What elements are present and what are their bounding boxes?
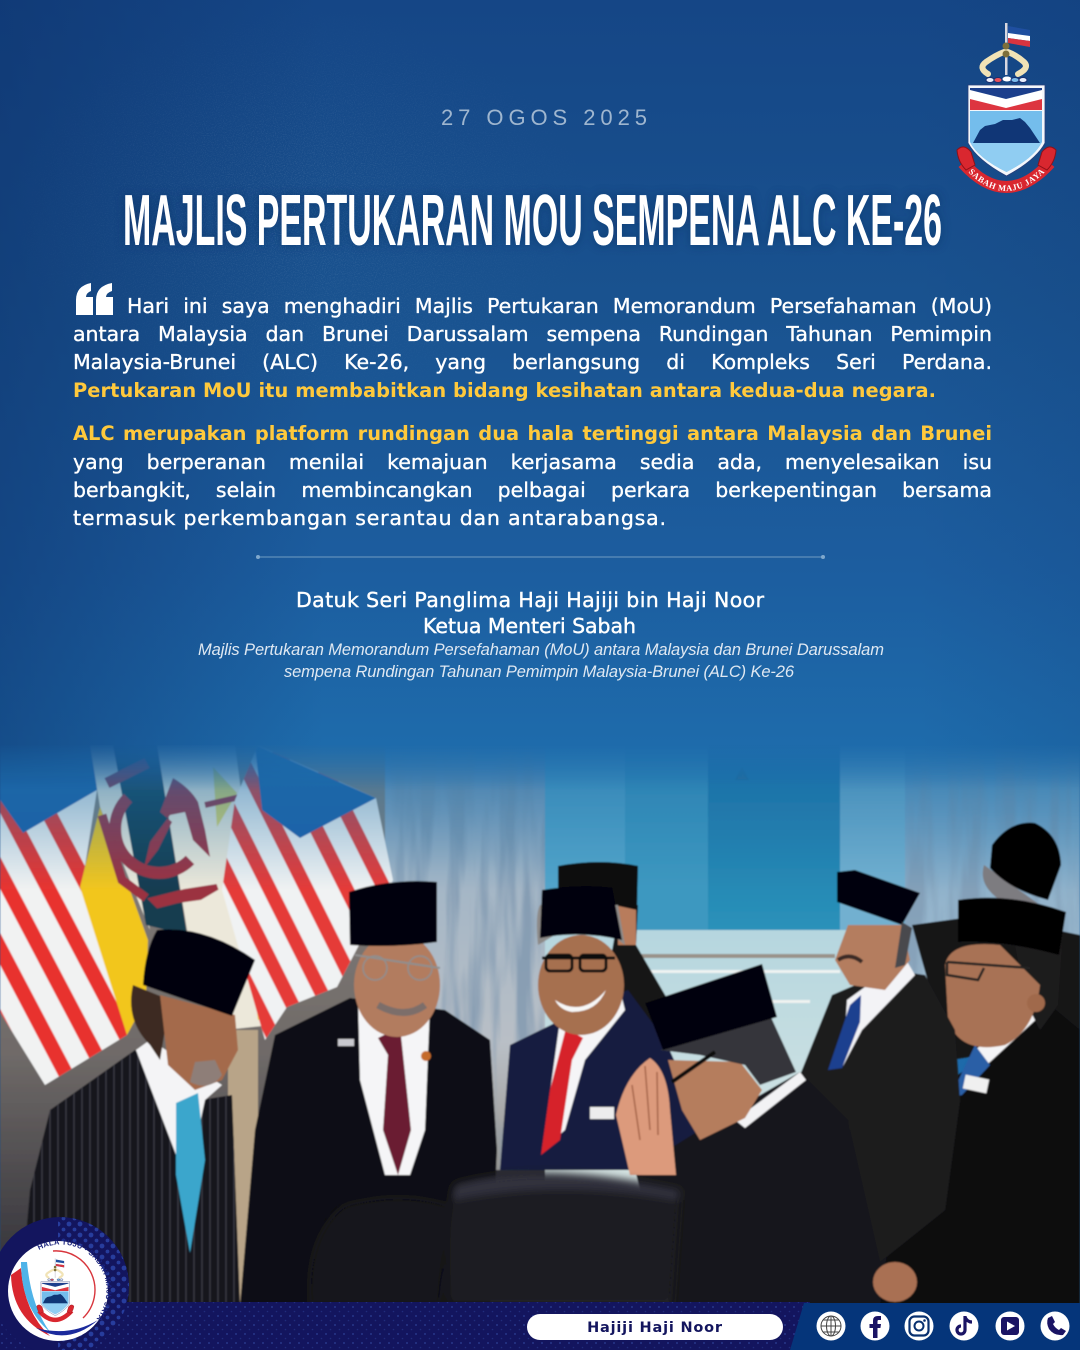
closing lines of both paragraphs: Pertukaran MoU itu membabitkan bidang kesihatan antara kedua-dua negara. — [73, 379, 936, 402]
speaker name: Datuk Seri Panglima Haji Hajiji bin Haji Noor — [296, 588, 765, 612]
speaker role: Ketua Menteri Sabah — [423, 614, 636, 638]
paragraph 1: justified lines: antara Malaysia dan Brunei Darussalam sempena Rundingan Tahunan Pemimpin — [73, 322, 992, 346]
Sultan of Brunei — [20, 929, 255, 1305]
paragraph 2: justified lines: ALC merupakan platform rundingan dua hala tertinggi antara Malaysia dan Brunei — [73, 422, 992, 445]
blurred foreground heads — [309, 1173, 680, 1305]
flag of Brunei — [80, 745, 272, 1035]
icon: phone — [1040, 1312, 1070, 1340]
paragraph 2: justified lines: berbangkit, selain membincangkan pelbagai perkara berkepentingan bersama — [73, 478, 992, 502]
badge motto text: HALA TUJU • SABAH MAJU JAYA — [37, 1240, 112, 1320]
Datuk Seri Anwar Ibrahim — [240, 881, 497, 1305]
paragraph 2: justified lines — [73, 422, 992, 502]
icon: facebook — [860, 1312, 890, 1340]
closing lines of both paragraphs — [73, 379, 936, 530]
crest of Sabah — [956, 23, 1056, 193]
photo: leaders at the MoU ceremony — [0, 745, 1080, 1305]
icon: youtube — [996, 1312, 1024, 1340]
flag of Malaysia, right — [222, 754, 394, 1040]
ribbon motto text: SABAH MAJU JAYA — [968, 169, 1045, 192]
event caption — [198, 641, 884, 681]
man behind, centre — [558, 862, 668, 1040]
quotation mark icon — [76, 283, 113, 315]
paragraph 2: justified lines: yang berperanan menilai kemajuan kerjasama sedia ada, menyelesaikan isu — [73, 450, 992, 474]
date: 27 OGOS 2025 — [441, 105, 647, 130]
icon: tiktok — [950, 1312, 978, 1340]
event caption: Majlis Pertukaran Memorandum Persefahaman (MoU) antara Malaysia dan Brunei Darussalam — [198, 641, 884, 659]
paragraph 1: justified lines: Malaysia-Brunei (ALC) Ke-26, yang berlangsung di Kompleks Seri Perdana. — [73, 350, 992, 374]
social pill: name — [527, 1314, 783, 1340]
attribution — [198, 588, 884, 681]
back man in songkok, far right — [912, 823, 1080, 1060]
photo backdrop: wall, curtains and floor — [0, 745, 1080, 1305]
divider — [256, 555, 825, 559]
social pill: name: Hajiji Haji Noor — [587, 1320, 723, 1336]
flag of Malaysia, left — [0, 754, 128, 1086]
logo badge: Hala Tuju Sabah Maju Jaya — [0, 1217, 129, 1350]
background gradient — [0, 0, 1080, 1074]
minister in navy suit, centre — [499, 886, 696, 1172]
bowing minister with hands together — [615, 963, 840, 1303]
bottom bar — [0, 1302, 1080, 1350]
closing lines of both paragraphs: termasuk perkembangan serantau dan antarabangsa. — [73, 506, 666, 530]
top tint over flags and wall — [0, 745, 1080, 891]
paragraph 1: justified lines: Hari ini saya menghadiri Majlis Pertukaran Memorandum Persefahaman (MoU) — [127, 294, 992, 318]
Datuk Seri Hajiji — [800, 870, 960, 1262]
event caption: sempena Rundingan Tahunan Pemimpin Malaysia-Brunei (ALC) Ke-26 — [284, 663, 795, 681]
paragraph 1: justified lines — [73, 294, 992, 374]
man with glasses, right — [873, 898, 1080, 1305]
icon: instagram — [904, 1312, 934, 1340]
icon: website — [816, 1312, 846, 1340]
